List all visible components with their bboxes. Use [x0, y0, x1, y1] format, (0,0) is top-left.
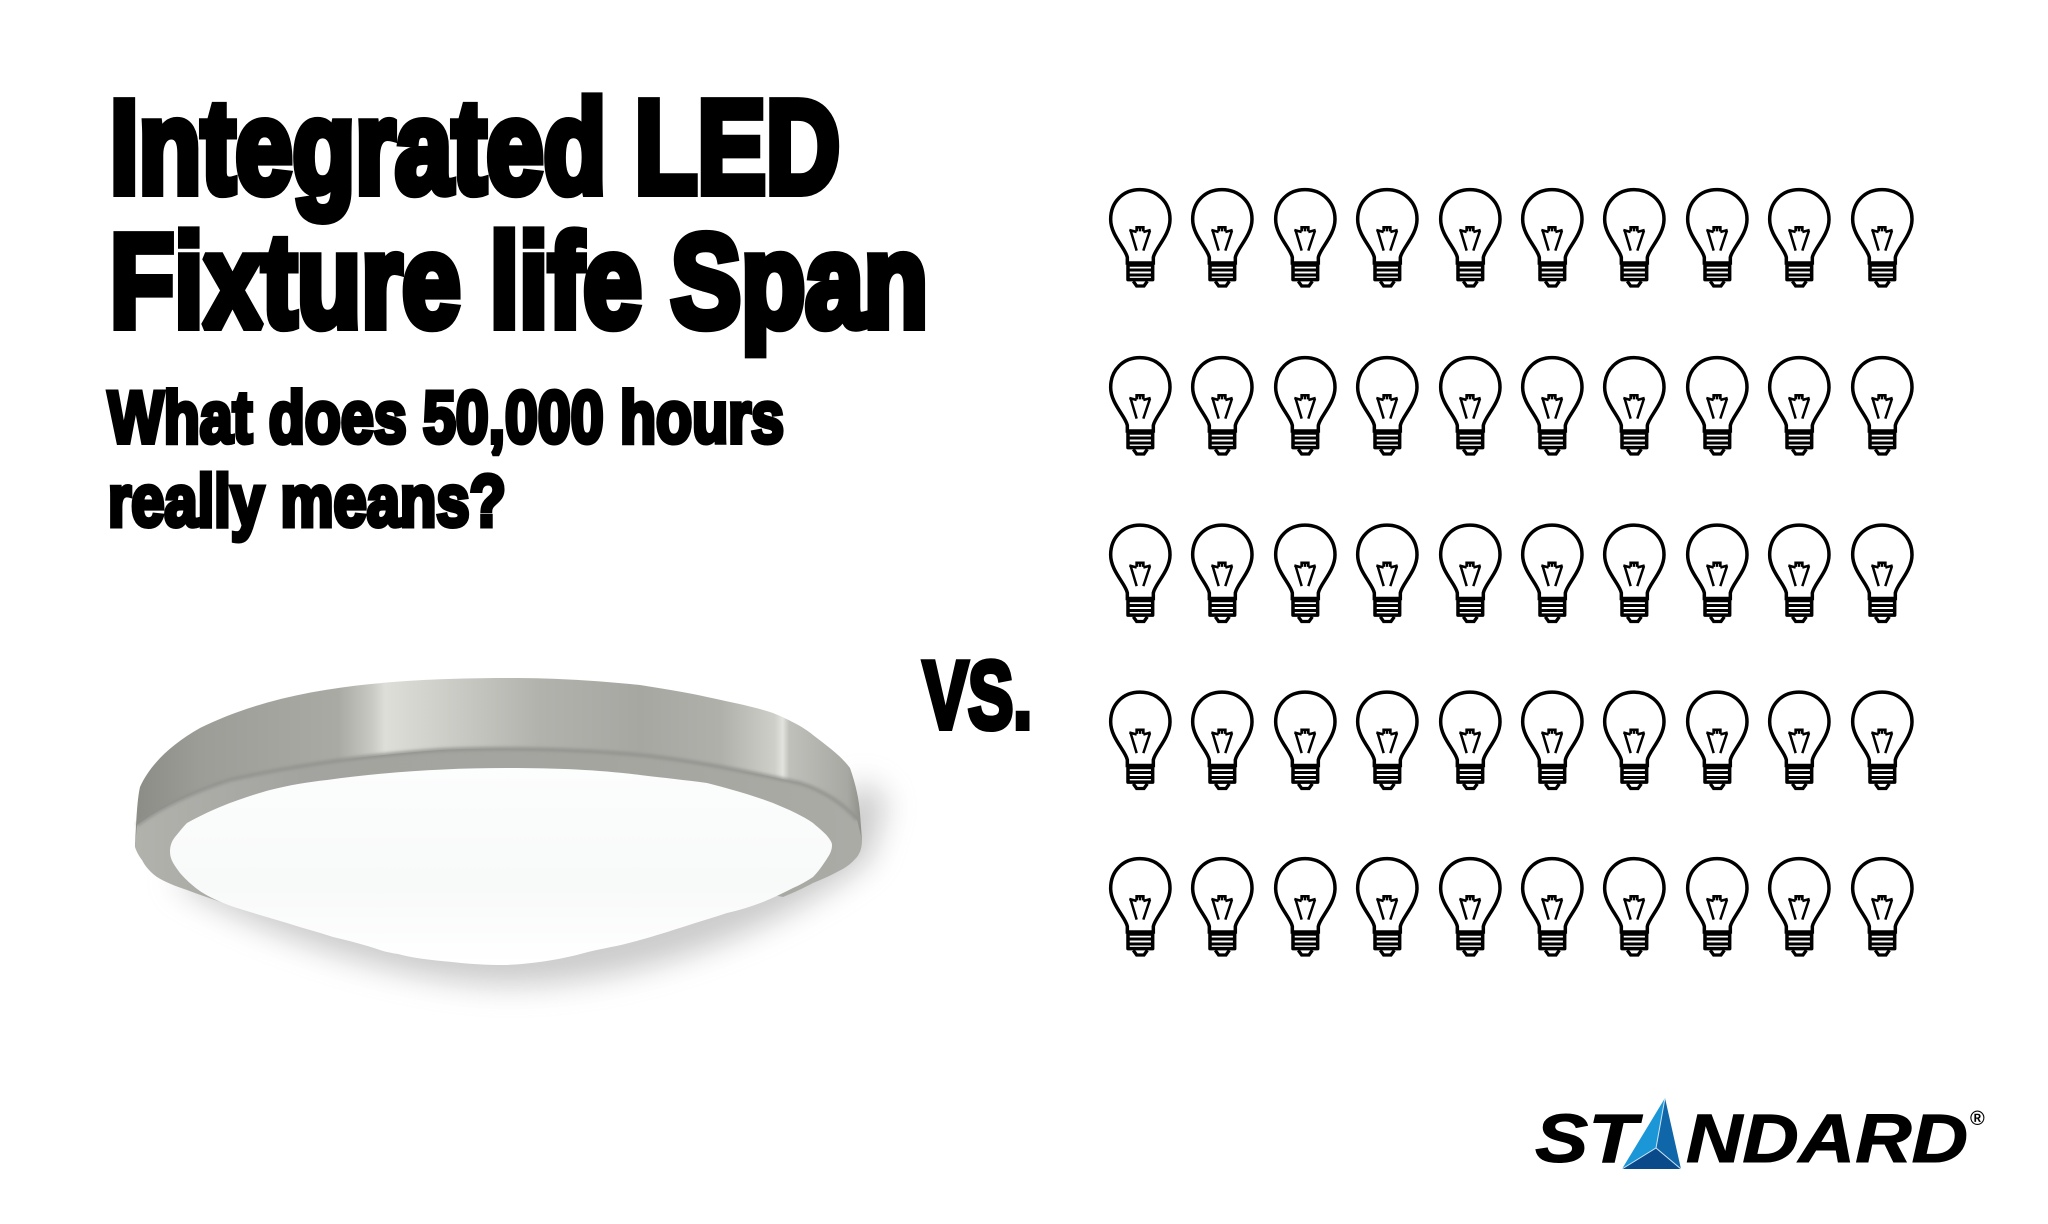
- logo: STANDARD: [1535, 1098, 1985, 1177]
- bulb grid: fifty incandescent bulbs: [1111, 190, 1912, 955]
- vs label: VS.: [923, 642, 1032, 749]
- registered mark: ®: [1970, 1108, 1985, 1130]
- subtitle line 2: really means?: [108, 461, 506, 542]
- logo text ST: ST: [1535, 1100, 1643, 1177]
- subtitle line 1: What does 50,000 hours: [108, 378, 784, 458]
- bulb row 4: [1111, 692, 1912, 788]
- bulb row 2: [1111, 358, 1912, 454]
- fixture glass diffuser: [170, 768, 832, 965]
- ceiling light fixture: [135, 678, 888, 985]
- bulb row 1: [1111, 190, 1912, 286]
- fixture metal band: [135, 678, 862, 847]
- fixture shadow: [170, 780, 888, 985]
- logo triangle A: [1622, 1098, 1681, 1169]
- fixture rim ridge line: [137, 749, 857, 825]
- title: [110, 74, 928, 354]
- bulb row 3: [1111, 525, 1912, 621]
- logo text NDARD: NDARD: [1686, 1100, 1968, 1177]
- title line 2: Fixture life Span: [110, 208, 928, 354]
- bulb row 5: [1111, 859, 1912, 955]
- fixture lower rim: [135, 749, 862, 905]
- title line 1: Integrated LED: [110, 74, 840, 220]
- subtitle: [108, 378, 784, 542]
